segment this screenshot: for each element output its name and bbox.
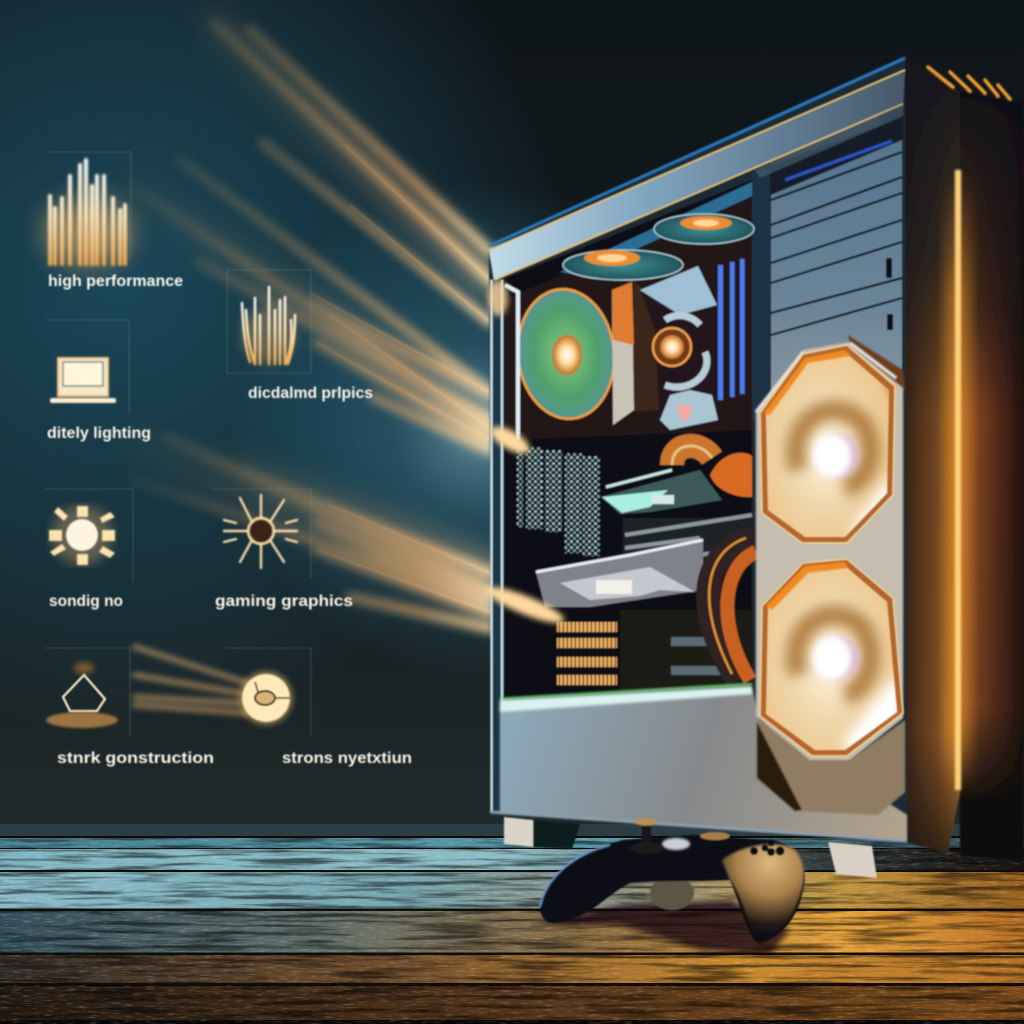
left edge vent strip bbox=[491, 280, 518, 812]
icon: graphics flame bars bbox=[242, 287, 295, 364]
face buttons bbox=[722, 840, 784, 856]
controller body bbox=[540, 835, 805, 943]
perforated panels bbox=[517, 447, 600, 556]
label: gaming graphics: gaming graphics bbox=[215, 593, 353, 610]
fan housing plates bbox=[756, 335, 905, 760]
feature: high performance bbox=[44, 152, 183, 290]
led memory rows bbox=[557, 622, 617, 685]
feature: sondig no bbox=[45, 489, 133, 610]
case right side panel bbox=[960, 90, 1024, 860]
feature: dicdalmd prlpics bbox=[227, 270, 373, 402]
label: strons nyetxtiun: strons nyetxtiun bbox=[282, 750, 412, 767]
ram sticks bbox=[718, 259, 744, 400]
feature: ditely lighting bbox=[45, 320, 151, 442]
pump head bbox=[640, 266, 718, 430]
front panel bays bbox=[765, 104, 903, 420]
controller top highlight bbox=[662, 838, 690, 850]
bottom fan swirl bbox=[796, 615, 871, 695]
icon: laptop bbox=[50, 358, 116, 403]
light glow at glass entry bbox=[483, 280, 567, 629]
bottom fan bbox=[760, 555, 905, 760]
feature: strons nyetxtiun bbox=[225, 648, 412, 767]
lower beams bbox=[135, 647, 247, 713]
thumbsticks bbox=[630, 818, 730, 856]
icon: diamond on rubble bbox=[46, 662, 118, 728]
label: ditely lighting: ditely lighting bbox=[47, 425, 151, 442]
expansion slots bbox=[671, 637, 726, 675]
vertical post bbox=[752, 170, 770, 420]
label: high performance: high performance bbox=[48, 273, 183, 290]
feature: stnrk gonstruction bbox=[45, 648, 214, 767]
case side edge bbox=[905, 56, 960, 853]
label: sondig no: sondig no bbox=[49, 593, 123, 610]
case front frame bbox=[489, 58, 907, 842]
orange cables bbox=[672, 446, 756, 680]
feature: gaming graphics bbox=[210, 489, 353, 610]
heatsink block bbox=[612, 282, 660, 425]
green fan bbox=[511, 284, 621, 424]
wood floor bbox=[0, 824, 1024, 1024]
controller shadow bbox=[530, 900, 790, 955]
icon: glowing disc bbox=[239, 671, 293, 725]
game controller bbox=[530, 818, 805, 955]
icon: sun bbox=[49, 505, 115, 565]
label: stnrk gonstruction: stnrk gonstruction bbox=[57, 750, 214, 767]
glass interior bbox=[483, 180, 756, 812]
top band of case bbox=[489, 58, 905, 280]
strut under top band bbox=[560, 182, 752, 275]
label: dicdalmd prlpics: dicdalmd prlpics bbox=[248, 385, 373, 402]
top leds bbox=[928, 67, 1010, 99]
silver graphics card bbox=[536, 540, 703, 607]
top fan right bbox=[654, 214, 754, 244]
top fan left bbox=[563, 250, 683, 280]
lower case recess bbox=[757, 720, 905, 815]
light beams bbox=[130, 24, 490, 628]
top fan swirl bbox=[796, 410, 871, 488]
controller right grip bbox=[722, 844, 804, 943]
lower front panel bbox=[490, 684, 907, 841]
motherboard detail bbox=[620, 515, 753, 690]
teal graphics card bbox=[601, 470, 722, 514]
amber light strip bbox=[946, 170, 970, 790]
icon: snowflake gear bbox=[224, 495, 297, 568]
top fan bbox=[760, 345, 895, 545]
feet bbox=[504, 817, 877, 878]
icon: performance flame bars bbox=[44, 160, 132, 266]
